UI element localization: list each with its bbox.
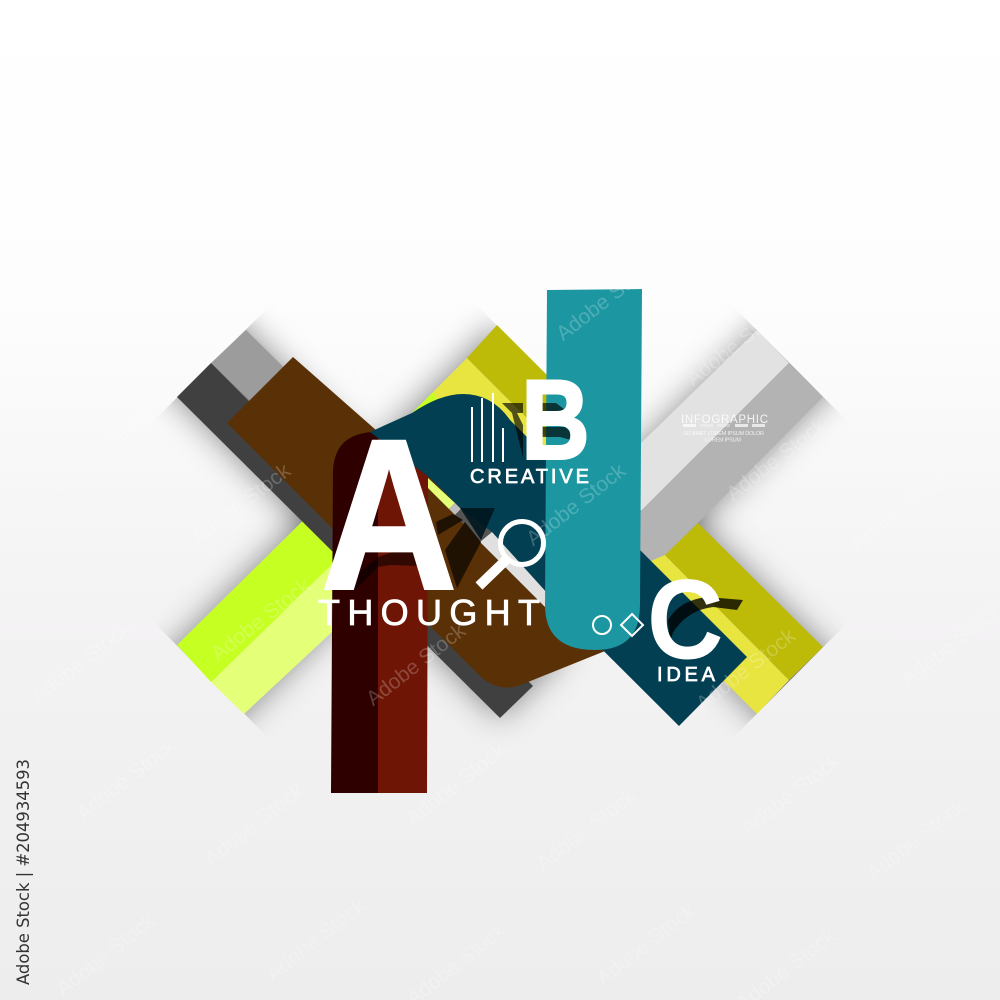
watermarks: Adobe Stock [200,779,308,871]
watermarks: Adobe Stock [842,127,950,219]
letter A: A [321,395,457,634]
watermarks: Adobe Stock [712,76,820,168]
watermarks: Adobe Stock [512,119,620,211]
arm: light gray top-right [620,330,823,580]
text block: infographic caption: INFOGRAPHIC [681,414,768,426]
brown rounded panel [227,357,620,688]
watermarks: Adobe Stock [682,299,790,391]
letter shadow of C [668,597,743,643]
letter shadow behind B [502,403,572,458]
letter shadow under A [355,508,495,590]
watermarks: Adobe Stock [72,734,180,826]
label THOUGHT: THOUGHT [318,592,540,633]
text block: infographic caption [681,414,768,444]
watermarks: Adobe Stock [887,247,995,339]
text block: infographic caption: LOREM IPSUM [705,438,741,444]
watermarks: Adobe Stock [737,749,845,841]
infographic canvas [0,289,1000,1000]
watermarks: Adobe Stock [592,899,700,991]
watermarks: Adobe Stock [350,297,458,389]
icon: vertical bars [472,393,503,462]
watermarks: Adobe Stock [180,114,288,206]
letter C: C [647,557,723,683]
watermarks: Adobe Stock [232,244,340,336]
arm shadows [162,314,838,731]
watermarks: Adobe Stock [207,574,315,666]
teal vertical ribbon [545,289,642,650]
letter B: B [522,357,589,482]
watermarks: Adobe Stock [862,794,970,886]
watermarks: Adobe Stock [362,619,470,711]
text block: infographic caption: SIT AMET LOREM IPSUM DOLOR [683,431,764,437]
arm: dark and mid gray top-left to bottom-right [177,330,560,718]
stock id label: Adobe Stock | #204934593 [14,759,34,985]
watermarks: Adobe Stock [52,69,160,161]
watermarks: Adobe Stock [27,617,135,709]
watermarks: Adobe Stock [262,894,370,986]
dark blue panel [370,394,747,726]
watermarks: Adobe Stock [532,784,640,876]
watermarks: Adobe Stock [52,909,160,1000]
watermarks: Adobe Stock [522,459,630,551]
label IDEA: IDEA [657,664,716,686]
watermarks: Adobe Stock [722,414,830,506]
watermarks: Adobe Stock [552,254,660,346]
arm: lime and yellow bottom-left to top [177,325,560,714]
icon: diamond [621,614,643,636]
arm: olive and yellow bottom-right [630,523,823,714]
pale lime sliver [428,478,455,509]
watermarks: Adobe Stock [385,76,493,168]
gray strip between panels [449,503,548,610]
watermarks: Adobe Stock [187,459,295,551]
watermarks: Adobe Stock [17,274,125,366]
watermarks: Adobe Stock [847,464,955,556]
label CREATIVE: CREATIVE [470,466,589,488]
icon: magnifier [479,522,544,586]
watermarks: Adobe Stock [402,739,510,831]
watermarks: Adobe Stock [692,624,800,716]
icon: ring [593,616,611,634]
brown overlap below the strip [428,488,548,660]
red vertical ribbon [331,432,428,793]
watermarks: Adobe Stock [47,404,155,496]
